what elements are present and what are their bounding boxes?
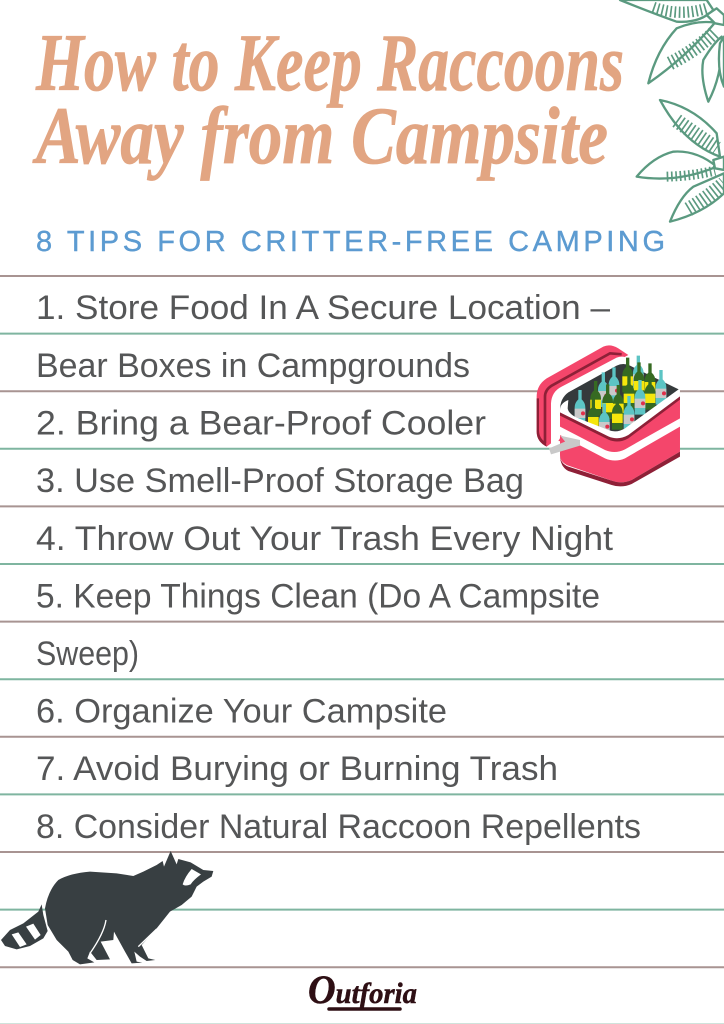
tips list: Bear Boxes in Campgrounds [36, 347, 470, 385]
title [32, 17, 624, 181]
tips list: 5. Keep Things Clean (Do A Campsite [36, 577, 600, 615]
raccoon body [45, 851, 213, 964]
logo: Outforia: Outforia [308, 967, 417, 1012]
icon: raccoon [1, 851, 213, 964]
raccoon tail [1, 904, 48, 949]
raccoon eye patch [183, 869, 201, 885]
tips list [36, 289, 641, 846]
subtitle: 8 TIPS FOR CRITTER-FREE CAMPING [36, 226, 665, 258]
tips list: 2. Bring a Bear-Proof Cooler [36, 405, 486, 443]
icon: top leaf cluster [620, 0, 724, 102]
tips list: 6. Organize Your Campsite [36, 693, 447, 731]
icon: bottom leaf cluster [637, 100, 724, 222]
icon: cooler with bottles [537, 345, 680, 486]
tips list: 3. Use Smell-Proof Storage Bag [36, 462, 524, 500]
tips list: 8. Consider Natural Raccoon Repellents [36, 808, 641, 846]
title: Away from Campsite [32, 90, 608, 181]
tips list: 1. Store Food In A Secure Location – [36, 289, 610, 327]
tips list: Sweep) [36, 635, 139, 673]
tips list: 4. Throw Out Your Trash Every Night [36, 520, 614, 558]
tips list: 7. Avoid Burying or Burning Trash [36, 750, 558, 788]
